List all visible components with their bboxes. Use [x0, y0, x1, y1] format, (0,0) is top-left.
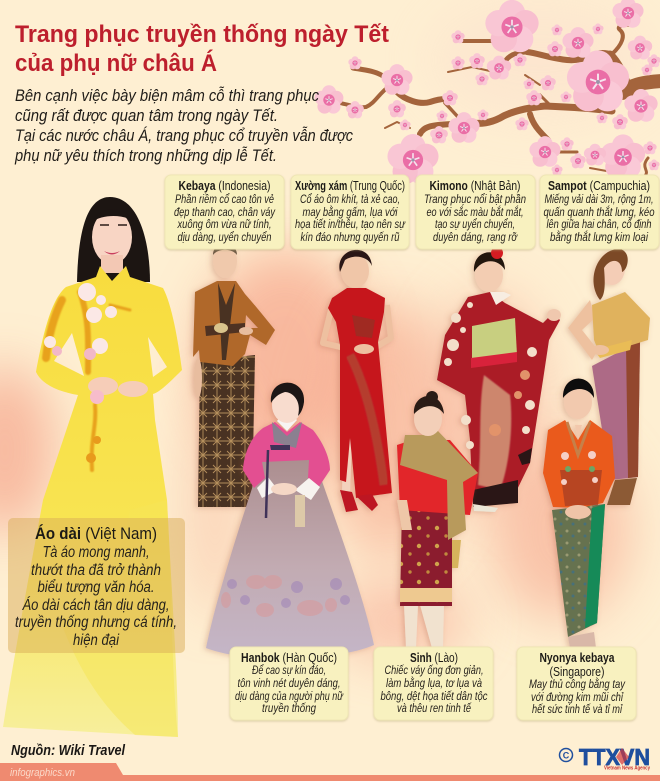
card: nyonya kebaya	[517, 647, 636, 720]
card: kebaya: Phần riềm cổ cao tôn vẻ	[175, 192, 274, 206]
card: sinh: bông, dệt họa tiết dân tộc	[380, 689, 488, 703]
intro text: Tại các nước châu Á, trang phục cổ truyền vẫn được	[15, 126, 353, 145]
card: hanbok: tôn vinh nét duyên dáng,	[238, 676, 340, 690]
card: xường xám: kín đáo nhưng quyến rũ	[300, 230, 400, 244]
card: xường xám: họa tiết in/thêu, tạo nên sự	[295, 217, 406, 231]
card: nyonya kebaya: Nyonya kebaya	[540, 650, 615, 665]
card: áo dài: Áo dài cách tân dịu dàng,	[22, 597, 170, 614]
intro text: cũng rất được quan tâm trong ngày Tết.	[15, 106, 278, 125]
card: kimono: tạo sự uyển chuyển,	[435, 217, 515, 231]
figure: kebaya	[193, 244, 275, 507]
card: nyonya kebaya: (Singapore)	[550, 664, 604, 679]
card: sinh: Chiếc váy ống đơn giản,	[384, 663, 484, 677]
card: sinh: Sinh (Lào)	[410, 650, 458, 665]
card: kimono: duyên dáng, rạng rỡ	[433, 230, 518, 244]
card: sinh	[374, 647, 493, 720]
figure: sampot	[568, 249, 650, 505]
intro text: phụ nữ yêu thích trong những dịp lễ Tết.	[14, 146, 277, 165]
figure: áo dài woman	[3, 197, 182, 737]
card: hanbok	[230, 647, 348, 720]
card: kebaya: dịu dàng, uyển chuyển	[178, 230, 272, 244]
card: kimono: Trang phục nổi bật phần	[424, 192, 526, 206]
figure: nyonya kebaya	[543, 378, 615, 648]
figure: hanbok	[206, 383, 374, 659]
card: áo dài: thướt tha đã trở thành	[31, 562, 161, 579]
title: Trang phục truyền thống ngày Tết	[15, 21, 389, 48]
card: xường xám: may bằng gấm, lụa với	[302, 204, 398, 219]
card: sinh: và thêu ren tinh tế	[397, 701, 472, 715]
intro text: Bên cạnh việc bày biện mâm cỗ thì trang phục	[15, 86, 319, 105]
card: nyonya kebaya: với đường kim mũi chỉ	[531, 690, 624, 704]
card: kimono: eo với sắc màu bắt mắt,	[426, 204, 524, 219]
card: nyonya kebaya: hết sức tinh tế và tỉ mỉ	[532, 702, 623, 716]
title	[15, 21, 389, 77]
card: áo dài: Áo dài (Việt Nam)	[35, 524, 157, 543]
card: kimono	[416, 175, 535, 249]
card: kebaya: Kebaya (Indonesia)	[178, 178, 270, 193]
card: kimono: Kimono (Nhật Bản)	[430, 178, 520, 193]
card: hanbok: Hanbok (Hàn Quốc)	[241, 650, 337, 665]
source note: Nguồn: Wiki Travel	[11, 742, 126, 759]
title: của phụ nữ châu Á	[15, 49, 217, 77]
card: hanbok: Để cao sự kín đáo,	[252, 663, 326, 677]
logo: TTXVN: Vietnam News Agency	[604, 766, 650, 772]
card: sampot	[540, 175, 659, 249]
card: áo dài: biểu tượng văn hóa.	[38, 579, 154, 596]
cherry blossom branches	[315, 0, 660, 184]
card: áo dài: truyền thống nhưng cá tính,	[15, 614, 177, 631]
figure: sườn xám đỏ	[323, 250, 392, 512]
card: áo dài: hiện đại	[73, 632, 119, 649]
card: kebaya	[165, 175, 284, 249]
figure: sinh	[397, 391, 478, 648]
card: kebaya: xuông ôm vừa nữ tính,	[177, 217, 272, 231]
card: xường xám	[291, 175, 409, 249]
intro text	[14, 86, 353, 165]
logo: TTXVN: TTXVN	[579, 744, 650, 770]
footer bar	[0, 763, 660, 781]
card: xường xám: Cổ áo ôm khít, tà xẻ cao,	[300, 192, 400, 206]
logo: TTXVN: C	[563, 750, 570, 760]
footer bar: infographics.vn	[10, 767, 75, 779]
card: áo dài	[8, 518, 185, 653]
card: hanbok: truyền thống	[262, 701, 316, 715]
figure: kimono	[437, 247, 561, 512]
card: xường xám: Xường xám (Trung Quốc)	[295, 178, 405, 193]
card: áo dài: Tà áo mong manh,	[42, 544, 150, 561]
card: kebaya: đẹp thanh cao, chân váy	[174, 205, 276, 219]
card: sinh: làm bằng lụa, tơ lụa và	[386, 675, 482, 690]
card: nyonya kebaya: May thủ công bằng tay	[529, 676, 626, 691]
card: hanbok: dịu dàng của người phụ nữ	[235, 689, 344, 703]
